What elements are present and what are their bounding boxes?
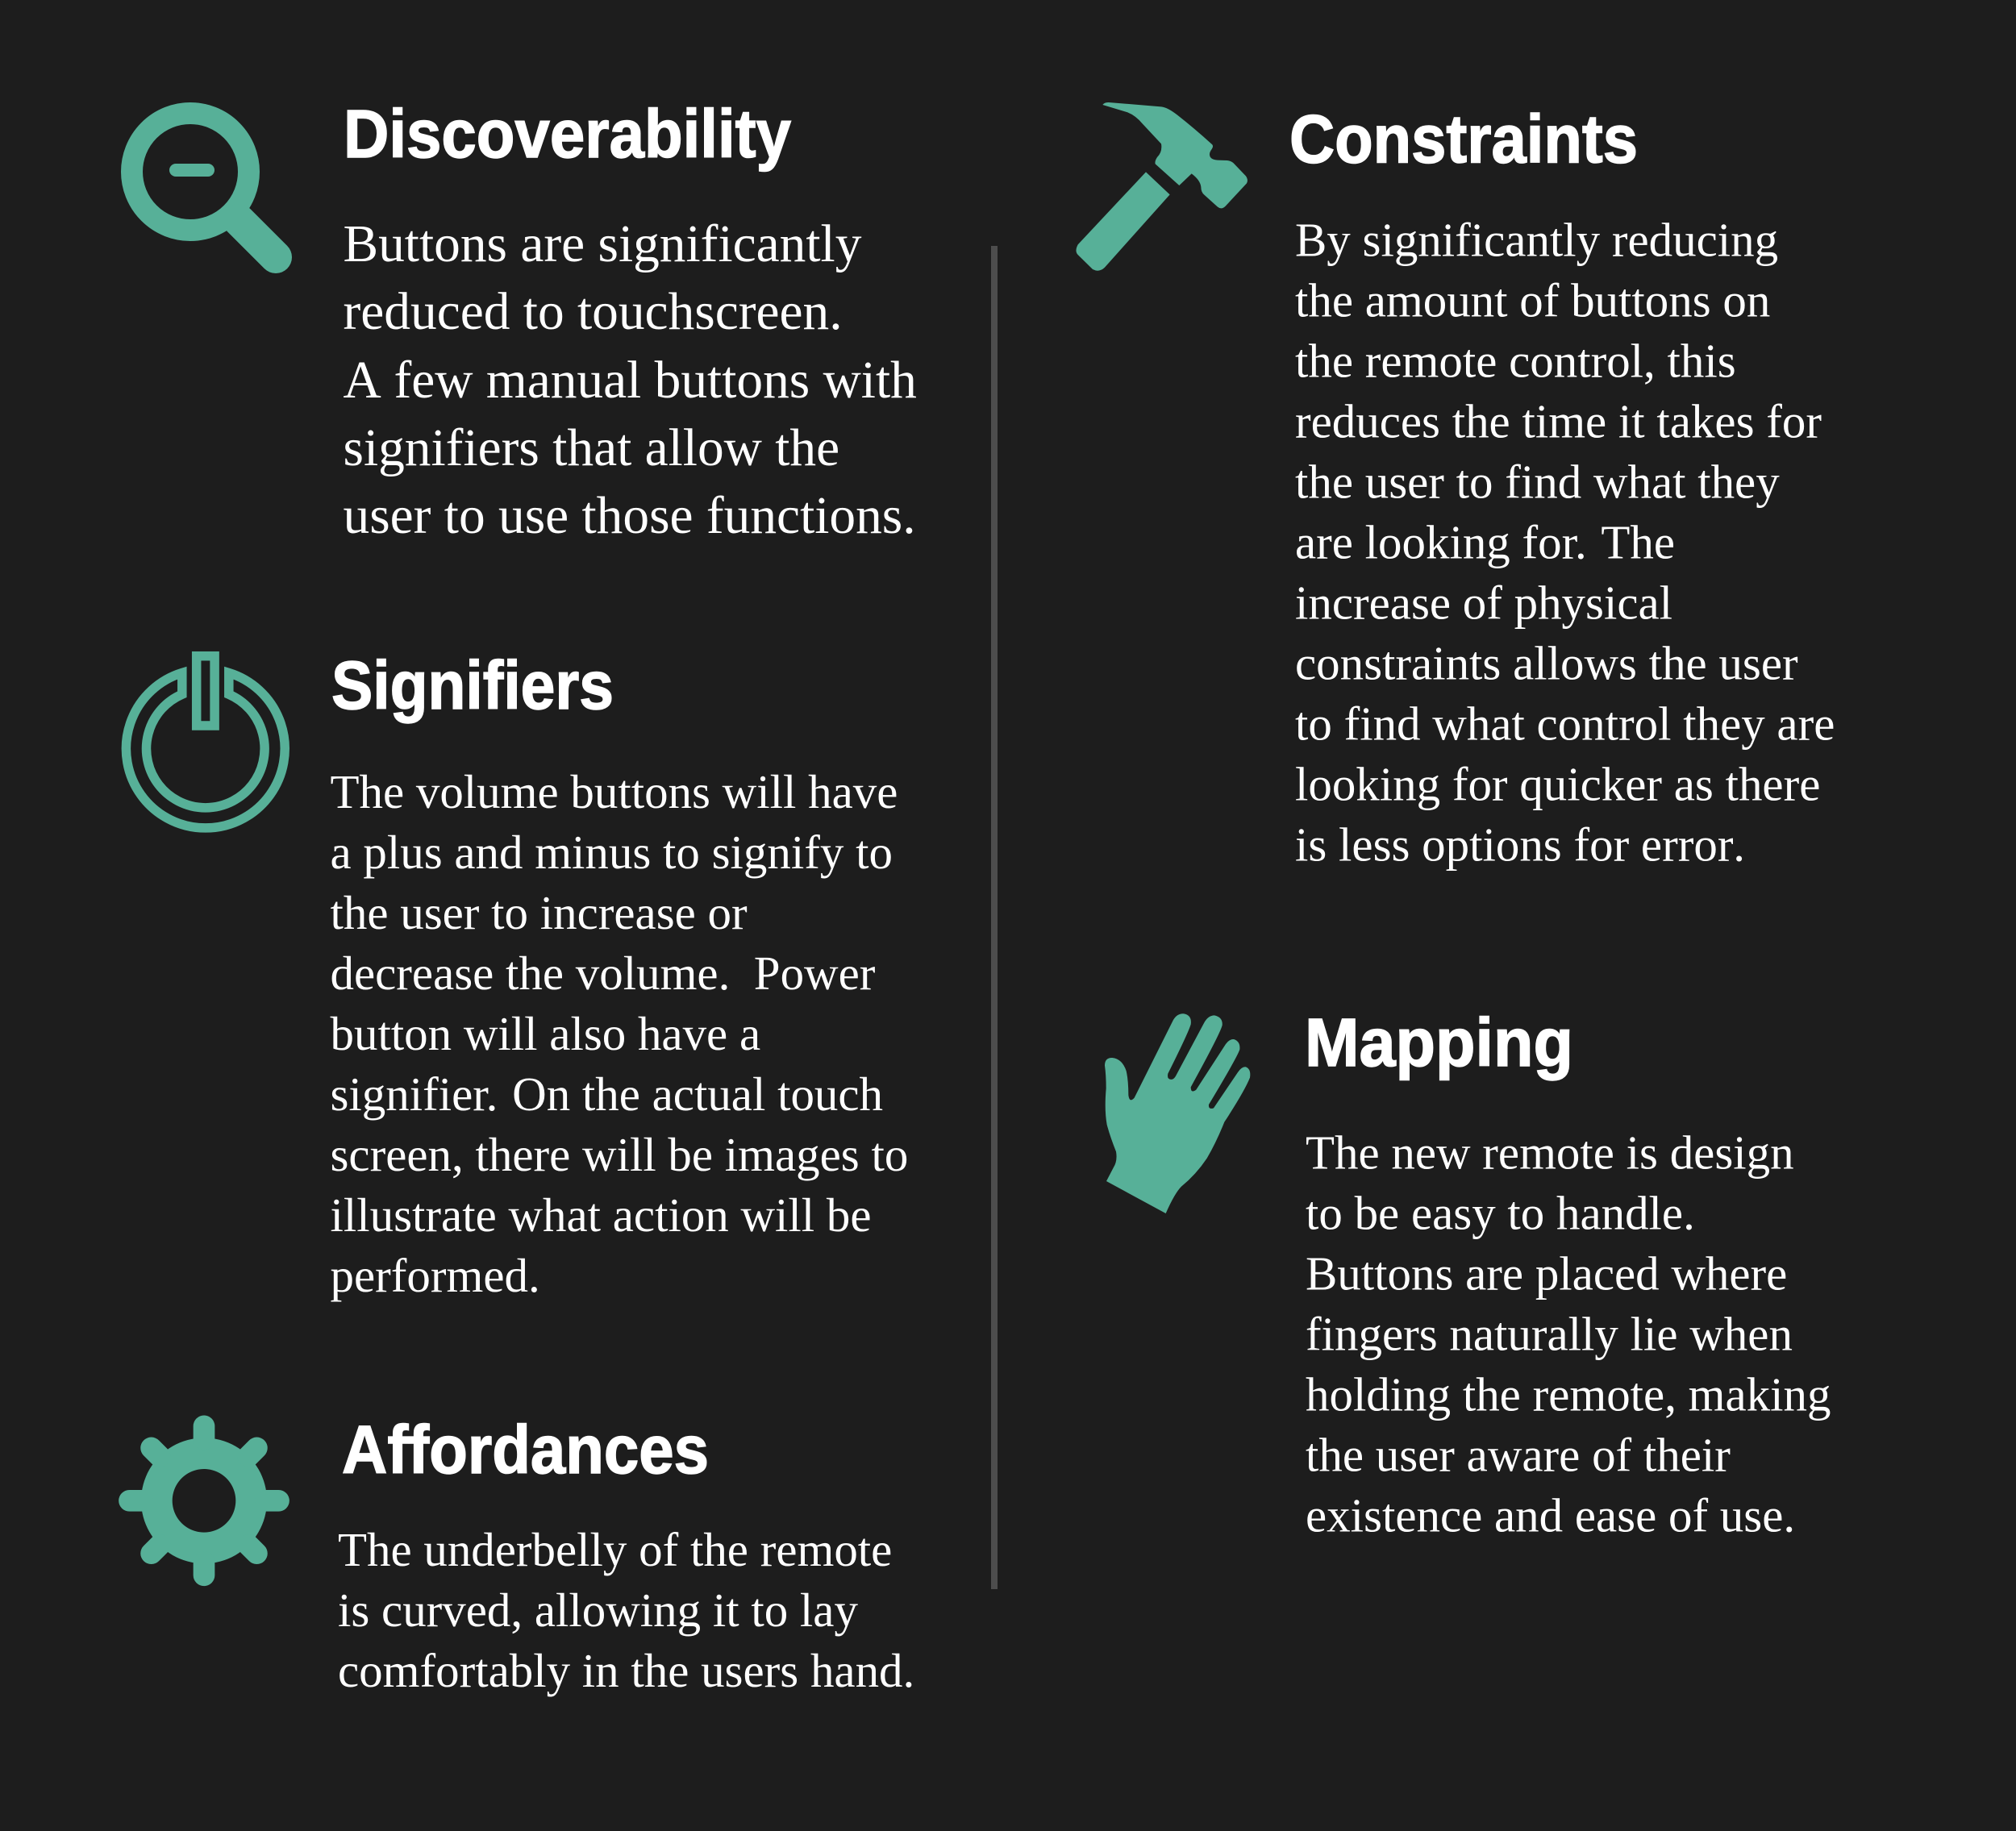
text: mapping body: to be easy to handle. (1306, 1187, 1695, 1240)
text: constraints body: the amount of buttons on (1295, 274, 1770, 327)
text: constraints body: are looking for. The (1295, 516, 1675, 569)
text: constraints body: looking for quicker as there (1295, 758, 1820, 811)
panel: constraints (0, 0, 1894, 871)
panel: discoverability (0, 0, 983, 545)
panel: mapping (0, 0, 1890, 1542)
text: affordances body: The underbelly of the remote (338, 1523, 892, 1576)
text: discoverability body: A few manual buttons with (344, 352, 917, 410)
text: constraints body: the remote control, this (1295, 334, 1736, 387)
icon: power symbol (126, 656, 285, 828)
text: affordances body: comfortably in the users hand. (338, 1644, 914, 1697)
text: signifiers body: The volume buttons will have (331, 765, 898, 818)
text: constraints body: is less options for error. (1295, 818, 1745, 871)
text: mapping body: fingers naturally lie when (1306, 1308, 1793, 1361)
text: signifiers body: illustrate what action will be (331, 1188, 872, 1242)
heading: constraints: Constraints (1289, 102, 1638, 177)
text: mapping body: holding the remote, making (1306, 1367, 1831, 1421)
text: signifiers body: decrease the volume. Power (331, 947, 876, 1000)
text: mapping body: The new remote is design (1306, 1126, 1794, 1179)
icon: hammer (1076, 102, 1248, 271)
text: discoverability body: reduced to touchscreen. (344, 283, 843, 341)
icon: magnifying glass (132, 113, 276, 257)
text: signifiers body: screen, there will be images to (331, 1128, 908, 1181)
text: signifiers body: a plus and minus to signify to (331, 826, 893, 879)
text: mapping body: the user aware of their (1306, 1429, 1731, 1482)
text: signifiers body: performed. (331, 1249, 540, 1302)
text: mapping body: existence and ease of use. (1306, 1488, 1795, 1542)
panel: affordances (0, 0, 952, 1697)
heading: affordances: Affordances (342, 1412, 709, 1488)
text: signifiers body: the user to increase or (331, 886, 748, 939)
panel: signifiers (0, 0, 968, 1302)
text: constraints body: By significantly reducing (1295, 213, 1778, 266)
heading: discoverability: Discoverability (344, 96, 791, 172)
text: constraints body: constraints allows the user (1295, 637, 1798, 690)
text: signifiers body: signifier. On the actual touch (331, 1067, 883, 1121)
text: constraints body: the user to find what they (1295, 455, 1780, 508)
heading: mapping: Mapping (1305, 1005, 1573, 1080)
text: mapping body: Buttons are placed where (1306, 1246, 1787, 1300)
text: discoverability body: Buttons are significantly (344, 215, 862, 273)
text: affordances body: is curved, allowing it to lay (338, 1583, 858, 1637)
text: discoverability body: user to use those functions. (344, 487, 916, 545)
icon: hand (1105, 1013, 1250, 1213)
icon: gear (129, 1426, 279, 1575)
text: constraints body: reduces the time it takes for (1295, 395, 1822, 448)
text: signifiers body: button will also have a (331, 1007, 760, 1060)
heading: signifiers: Signifiers (331, 647, 614, 723)
text: constraints body: increase of physical (1295, 576, 1672, 629)
text: discoverability body: signifiers that allow the (344, 419, 839, 477)
text: constraints body: to find what control they are (1295, 697, 1835, 750)
